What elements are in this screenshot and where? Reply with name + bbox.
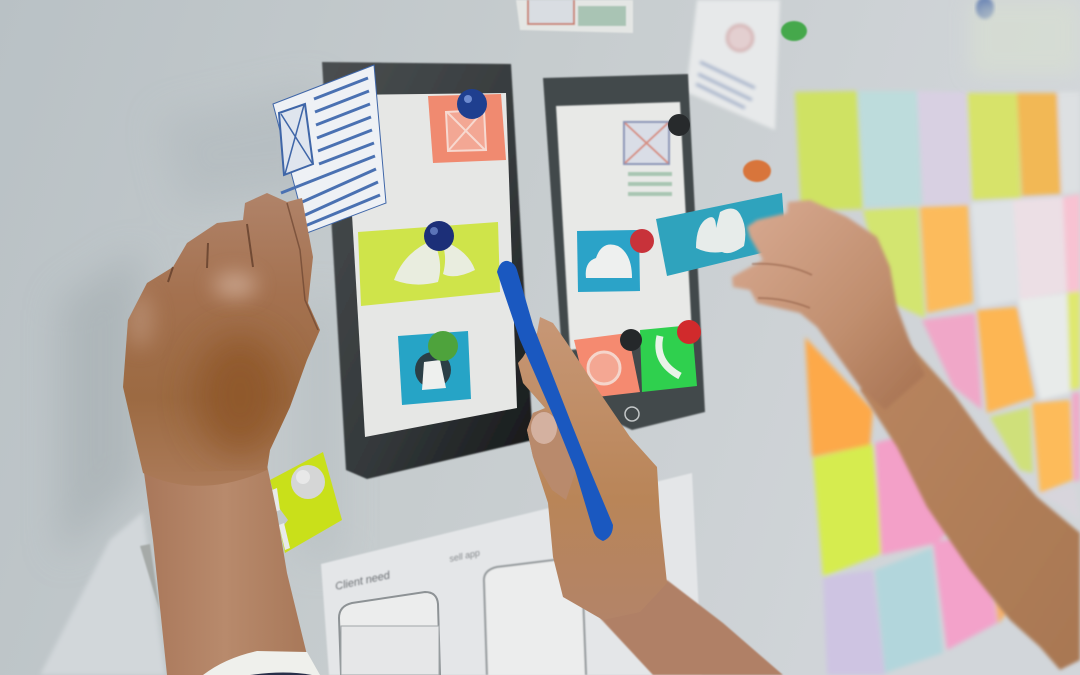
paper: bottom wireframe sheet <box>321 473 702 675</box>
hand <box>732 200 925 410</box>
pin: green top <box>781 21 807 41</box>
forearm <box>143 465 307 675</box>
orange note <box>574 333 640 398</box>
paper: top scrap <box>516 0 633 33</box>
finger separations <box>752 264 812 308</box>
forearm <box>860 340 1080 670</box>
top right bright haze <box>970 0 1080 75</box>
lower-left white paper <box>40 512 165 675</box>
green phone note <box>640 325 697 392</box>
tablet body <box>543 74 705 430</box>
teal note with cloud <box>577 230 640 292</box>
pin: green <box>428 331 458 361</box>
pin: red <box>630 229 654 253</box>
tablet wireframe 1 <box>322 62 533 479</box>
right hand and forearm <box>732 200 1080 670</box>
thumbnail <box>531 412 557 444</box>
lime note with wings <box>358 222 500 306</box>
blue pen hand and arm <box>497 261 783 675</box>
sticky notes row 3 <box>922 313 982 410</box>
tablet wireframe 2 <box>543 74 705 430</box>
left hand and forearm <box>123 193 320 675</box>
home button <box>625 407 639 421</box>
yellow-green note with white pin <box>270 452 342 553</box>
hand shadows on the board <box>60 85 340 560</box>
pen <box>497 261 613 541</box>
teal note with icon <box>398 331 471 405</box>
sleeve <box>203 651 320 675</box>
hand <box>518 317 667 620</box>
tablet screen paper <box>345 93 517 437</box>
sticky notes left column <box>805 337 873 457</box>
orange note with image icon <box>428 94 506 163</box>
tablet screen paper <box>556 102 692 350</box>
paper: bottom wireframe sheet: sell app <box>448 548 481 564</box>
sticky notes row 1 <box>795 91 863 211</box>
pin: orange <box>743 160 771 182</box>
paper: bottom wireframe sheet: Client need <box>334 569 392 593</box>
sticky notes row 2 <box>863 207 925 318</box>
pin: black <box>668 114 690 136</box>
phone outline 2 <box>484 558 586 675</box>
thumb <box>527 411 576 500</box>
back of hand <box>123 193 320 486</box>
pin: red <box>677 320 701 344</box>
paper: top wireframe card <box>686 0 780 130</box>
tablet body <box>322 62 533 479</box>
blurred sticky note wall <box>795 91 1080 675</box>
pin: blue <box>457 89 487 119</box>
grey paper strip <box>140 544 160 612</box>
wireframe paper card <box>273 65 386 233</box>
pin: navy <box>424 221 454 251</box>
wireframe sketch <box>624 122 672 196</box>
little finger edge <box>287 203 318 330</box>
phone outline 1 <box>339 592 440 675</box>
hand shading <box>126 273 285 455</box>
pin: black <box>620 329 642 351</box>
knuckle lines <box>168 224 253 282</box>
sleeve interior <box>250 672 312 675</box>
blue note with people icon <box>656 193 786 276</box>
pin: blue top <box>976 0 994 19</box>
arm <box>600 580 783 675</box>
